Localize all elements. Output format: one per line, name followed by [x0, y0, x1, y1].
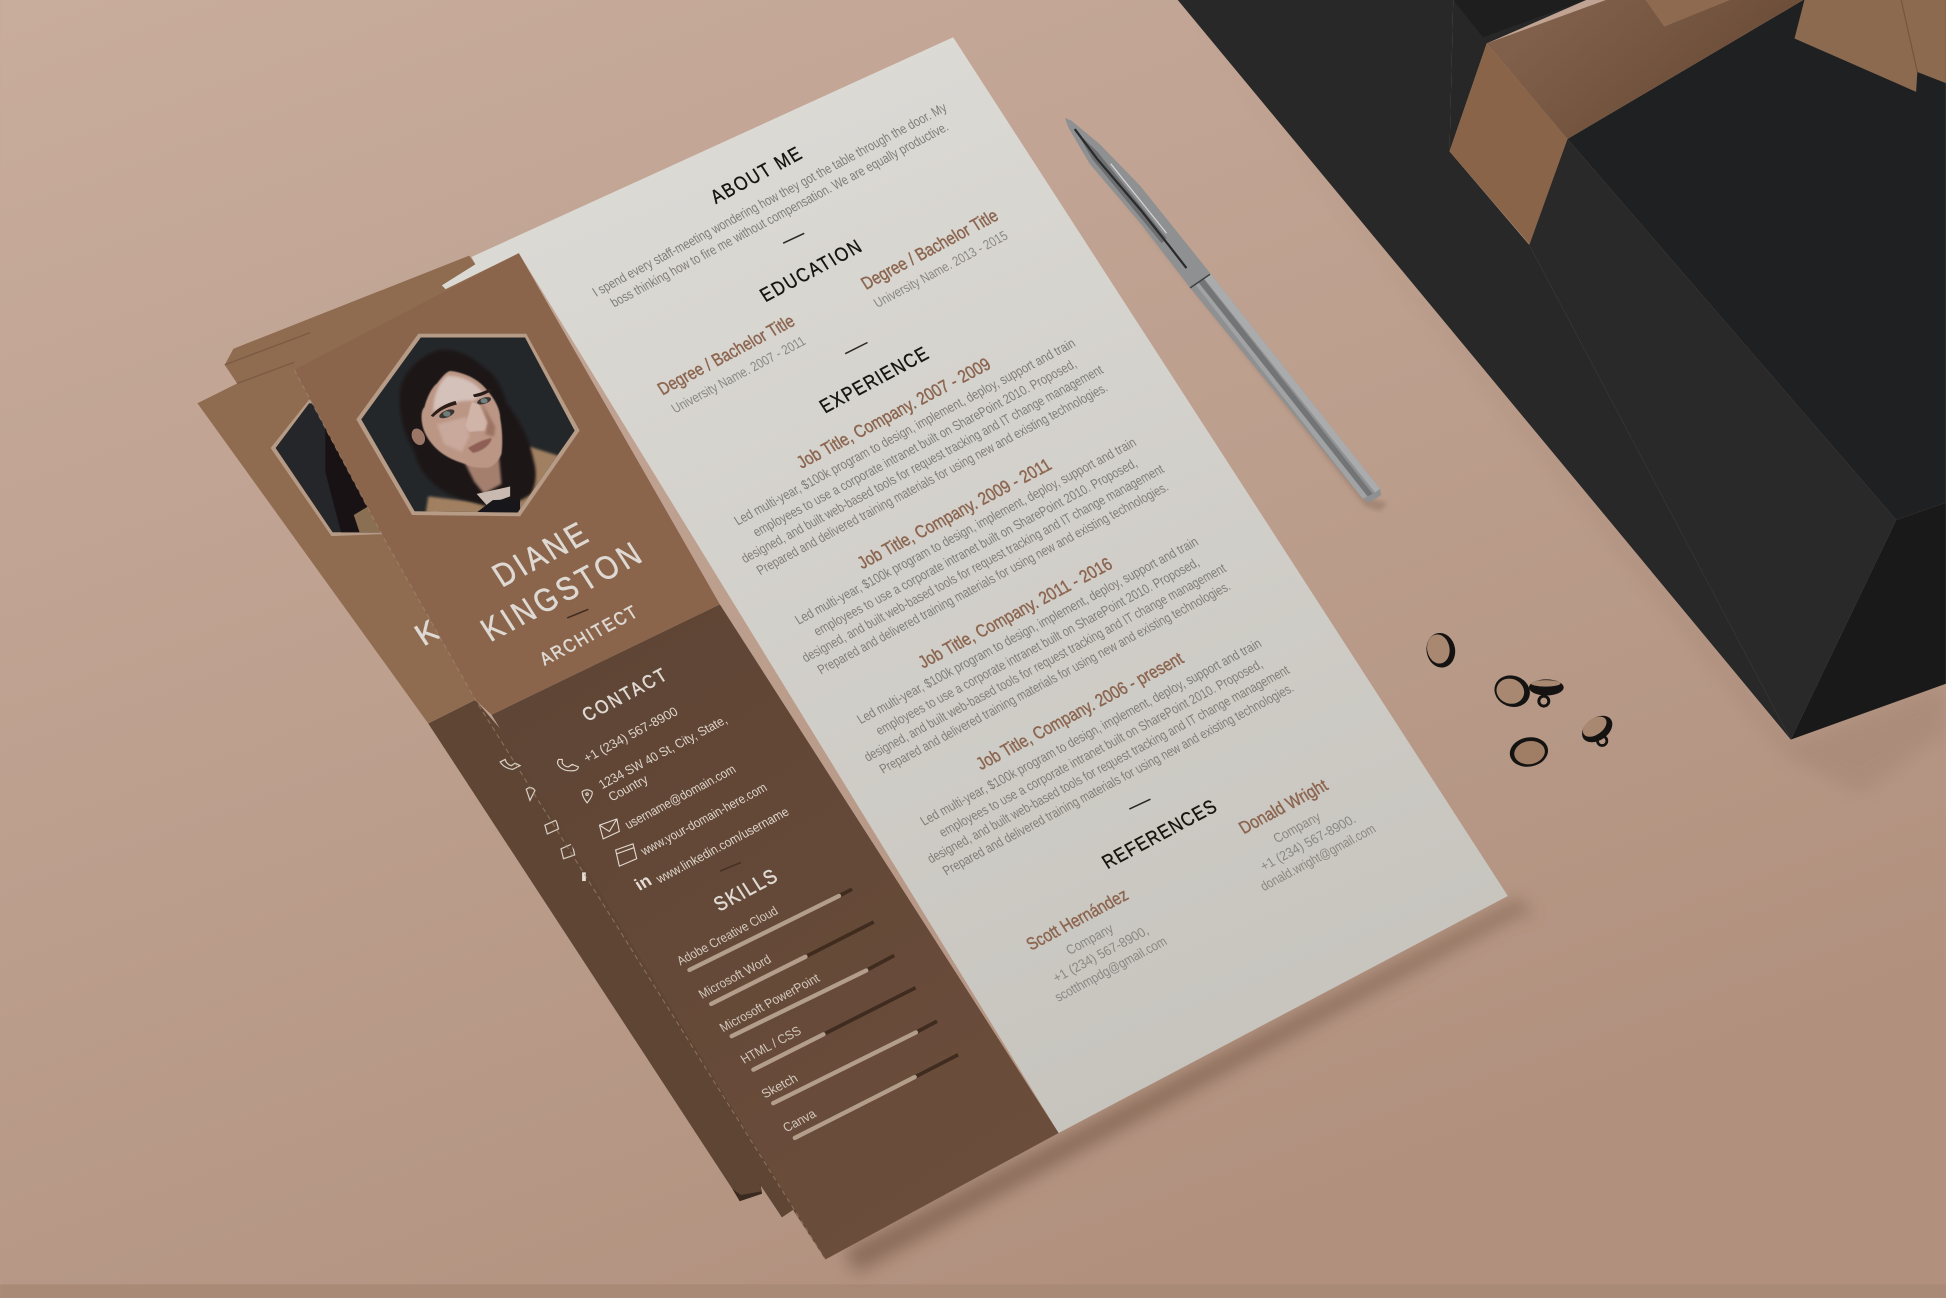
forehead highlight [433, 376, 484, 412]
hair [400, 350, 536, 507]
job 2: employees to use a corporate intranet built on SharePoint 2010. Proposed, [811, 456, 1140, 639]
heading: education: EDUCATION [755, 235, 865, 306]
gift box [1178, 0, 1946, 794]
face [422, 371, 502, 468]
about me text: boss thinking how to fire me without compensation. We are equally productive. [608, 119, 951, 310]
job role: ARCHITECT [535, 601, 642, 669]
job 1: designed, and built web-based tools for request tracking and IT change management [738, 362, 1106, 566]
button 4 [1507, 734, 1550, 770]
job 3: employees to use a corporate intranet built on SharePoint 2010. Proposed, [873, 555, 1202, 738]
skill: Microsoft Word: Microsoft Word [696, 952, 774, 1002]
job 3: Led multi-year, $100k program to design, implement, deploy, support and train [854, 534, 1201, 727]
reference: Scott: Company [1063, 921, 1116, 958]
contact heading: CONTACT [578, 664, 671, 726]
skill: Canva: Canva [780, 1106, 819, 1135]
icon: phone [558, 759, 578, 771]
job 4: employees to use a corporate intranet built on SharePoint 2010. Proposed, [936, 657, 1265, 840]
skill: Adobe Creative Cloud: Adobe Creative Cloud [674, 903, 781, 968]
skill: HTML / CSS: HTML / CSS [738, 1023, 804, 1067]
reference: Donald: Company [1270, 809, 1324, 846]
bottom strip [0, 1284, 1946, 1298]
heading: references: REFERENCES [1098, 795, 1221, 873]
eyes [439, 397, 491, 418]
icon: linkedin: in [631, 870, 655, 894]
about me text [590, 100, 951, 310]
reference: Scott: +1 (234) 567-8900, [1050, 923, 1151, 985]
sheet upper panel [197, 253, 519, 723]
heading: experience: EXPERIENCE [815, 342, 932, 417]
job 1: employees to use a corporate intranet built on SharePoint 2010. Proposed, [750, 356, 1079, 540]
ear [412, 428, 425, 446]
skill: Microsoft PowerPoint [717, 956, 894, 1036]
job 4: Prepared and delivered training materials for using new and existing technologies. [940, 680, 1296, 878]
name: DIANE [486, 515, 594, 594]
resume page: white body [442, 37, 1508, 1133]
contact details: Country [605, 772, 651, 804]
skills heading: SKILLS [710, 866, 782, 916]
resume page: sidebar [294, 253, 1059, 1260]
contact details: +1 (234) 567-8900 [580, 704, 681, 765]
education entry left: Degree / Bachelor Title [654, 311, 798, 399]
contact details [580, 704, 792, 886]
skill: Adobe Creative Cloud [674, 889, 852, 970]
reference: Scott: scotthmpdg@gmail.com [1052, 934, 1170, 1005]
button 2 [1490, 670, 1534, 712]
contact details: username@domain.com [622, 762, 738, 832]
ribbon [1450, 0, 1946, 244]
skill: Sketch [758, 1021, 937, 1103]
name: KINGSTON [474, 535, 648, 649]
skill: Sketch: Sketch [758, 1070, 800, 1101]
contact details: www.your-domain-here.com [637, 780, 770, 859]
job 3: designed, and built web-based tools for request tracking and IT change management [861, 561, 1229, 764]
contact details: www.linkedin.com/username [652, 804, 792, 886]
lips [468, 438, 492, 453]
education entry left: University Name. 2007 - 2011 [669, 334, 808, 416]
job 4: designed, and built web-based tools for request tracking and IT change management [925, 663, 1292, 866]
reference: Donald: Donald Wright [1235, 775, 1331, 838]
neck [462, 457, 501, 494]
job 2: Job Title, Company. 2009 - 2011 [854, 455, 1055, 573]
paper shadow [844, 900, 1533, 1273]
job 1: Job Title, Company. 2007 - 2009 [793, 354, 994, 472]
button 1 [1424, 631, 1458, 670]
skill: HTML / CSS [738, 988, 916, 1070]
about me text: I spend every staff-meeting wondering how they got the table through the door. My [590, 100, 950, 300]
job 2: designed, and built web-based tools for request tracking and IT change management [799, 462, 1167, 665]
brows [431, 401, 457, 417]
icon: mail [599, 819, 619, 839]
job 1: Prepared and delivered training materials for using new and existing technologies. [754, 380, 1110, 578]
icon: pin [582, 790, 592, 803]
job 3: Prepared and delivered training materials for using new and existing technologies. [877, 579, 1233, 776]
education entry right: University Name. 2013 - 2015 [871, 228, 1011, 311]
skill: Canva [780, 1055, 958, 1138]
back photo [270, 400, 382, 536]
reference: Donald [1235, 775, 1378, 894]
skill: Microsoft Word [696, 922, 874, 1004]
back contact icons [500, 759, 586, 881]
cufflinks and buttons [1424, 631, 1617, 770]
sidebar upper panel [294, 253, 720, 715]
skill: Microsoft PowerPoint: Microsoft PowerPoint [717, 970, 823, 1035]
job 4: Led multi-year, $100k program to design, implement, deploy, support and train [918, 636, 1264, 828]
button 3 [1529, 679, 1564, 706]
cheek highlight [437, 417, 469, 452]
icon: browser [616, 844, 637, 866]
tie [477, 499, 520, 512]
job 4: Job Title, Company. 2006 - present [972, 649, 1187, 774]
profile photo [354, 329, 583, 521]
reference: Donald: +1 (234) 567-8900. [1257, 812, 1359, 874]
job 1: Led multi-year, $100k program to design, implement, deploy, support and train [731, 336, 1078, 528]
reference: Scott [1023, 885, 1170, 1005]
collar [477, 486, 510, 505]
pen [1065, 118, 1387, 511]
sheet lower panel [428, 700, 825, 1260]
reference: Scott: Scott Hernández [1023, 885, 1132, 954]
back K: K [408, 613, 446, 652]
nose [465, 402, 488, 432]
back sheet stack [197, 253, 825, 1260]
job 3: Job Title, Company. 2011 - 2016 [914, 554, 1116, 672]
coat [424, 446, 558, 512]
job 2: Led multi-year, $100k program to design, implement, deploy, support and train [792, 435, 1139, 627]
reference: Donald: donald.wright@gmail.com [1257, 821, 1378, 894]
button 5 [1577, 710, 1617, 748]
heading: about me: ABOUT ME [706, 142, 806, 208]
education entry right: Degree / Bachelor Title [857, 206, 1002, 293]
job 2: Prepared and delivered training materials for using new and existing technologies. [815, 479, 1171, 677]
sidebar lower panel [492, 604, 1059, 1260]
contact details: 1234 SW 40 St, City, State, [596, 712, 730, 792]
